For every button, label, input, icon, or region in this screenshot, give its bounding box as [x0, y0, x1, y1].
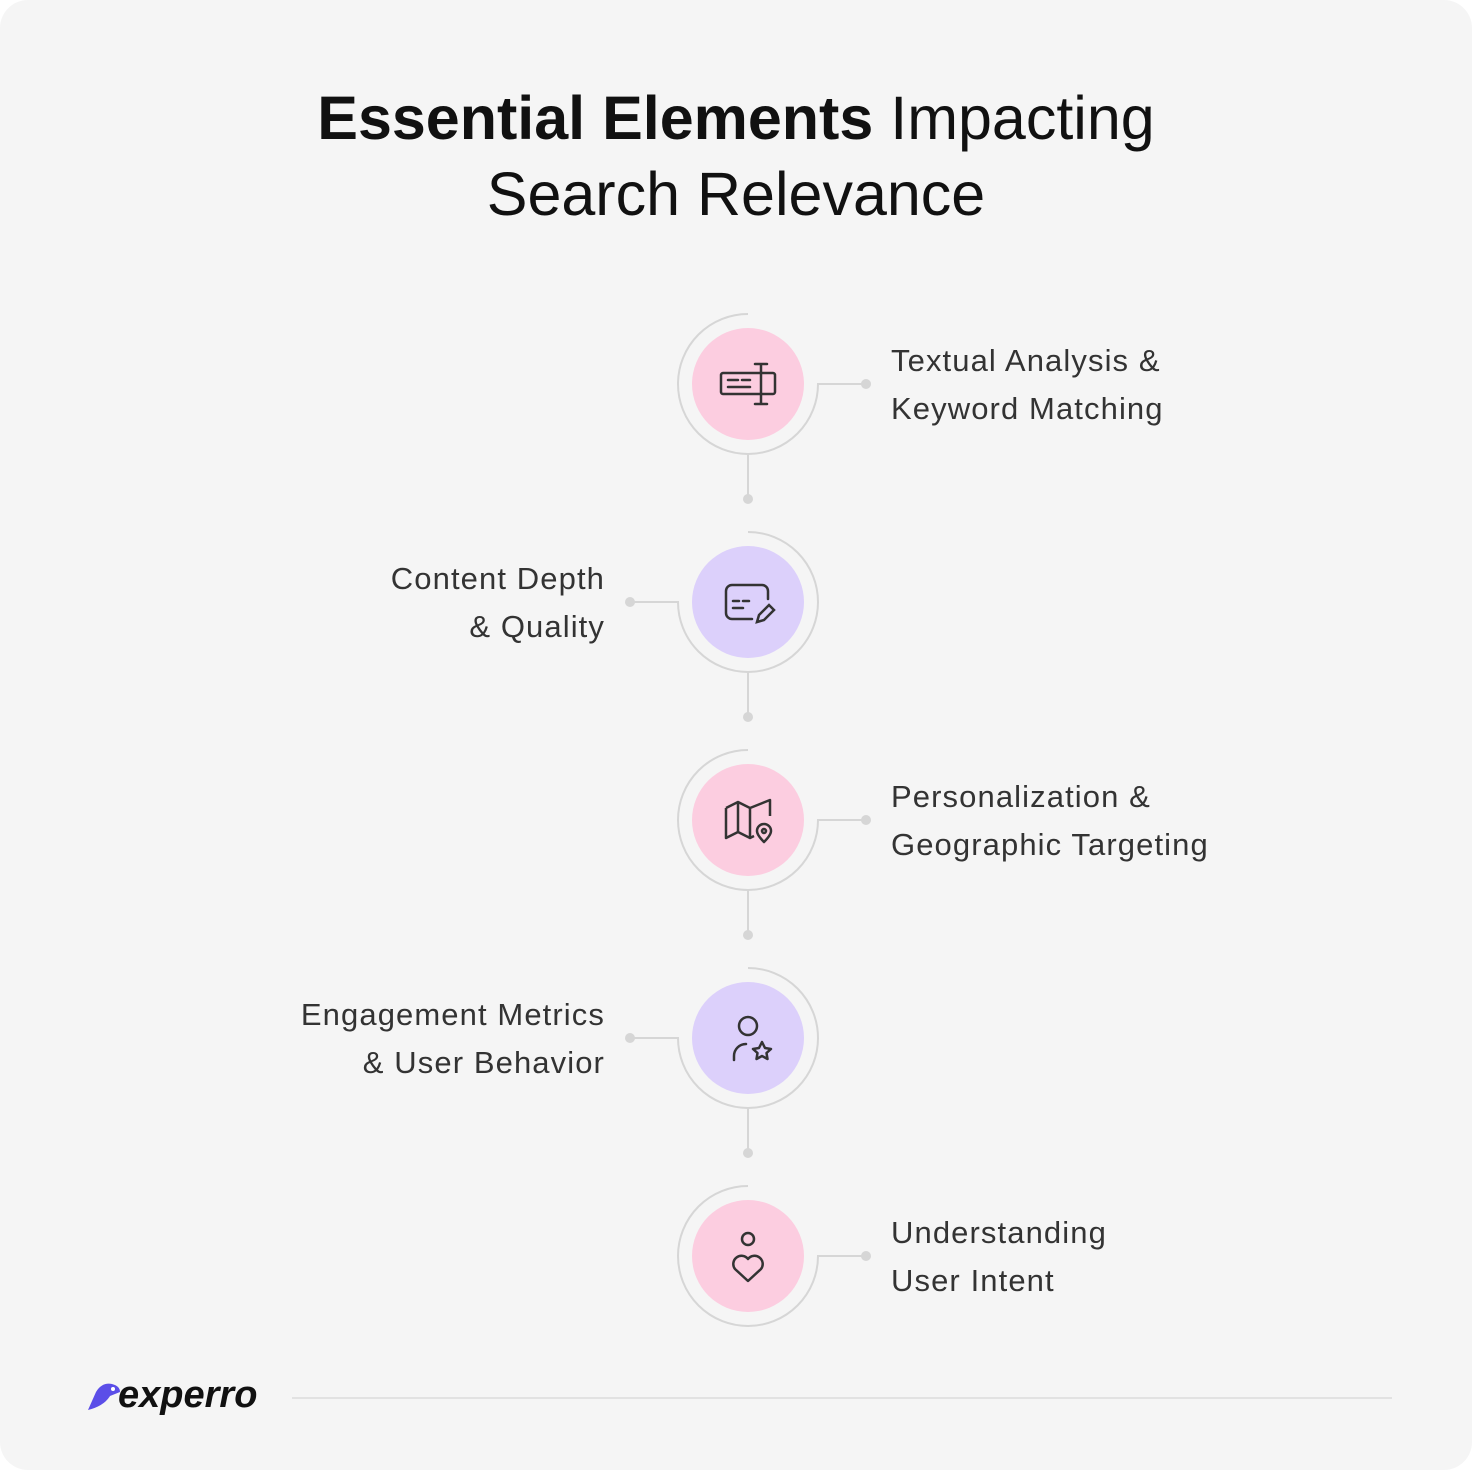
text: textual analysis: Keyword Matching — [891, 391, 1164, 426]
text: engagement — [301, 997, 605, 1080]
text: engagement: & User Behavior — [363, 1045, 605, 1080]
text: user intent — [891, 1215, 1107, 1298]
text: textual analysis — [891, 343, 1164, 426]
text: user intent: Understanding — [891, 1215, 1107, 1250]
text: user intent: User Intent — [891, 1263, 1055, 1298]
footer divider — [292, 1397, 1392, 1399]
text: content depth — [391, 561, 605, 644]
icon: content edit — [692, 546, 804, 658]
text: content depth: Content Depth — [391, 561, 605, 596]
title: Essential Elements Impacting — [317, 84, 1155, 152]
logo: experro — [118, 1374, 257, 1416]
icon: text input — [692, 328, 804, 440]
text: personalization — [891, 779, 1209, 862]
text: textual analysis: Textual Analysis & — [891, 343, 1161, 378]
text: engagement: Engagement Metrics — [301, 997, 605, 1032]
title — [317, 84, 1155, 228]
text: content depth: & Quality — [469, 609, 605, 644]
text: personalization: Geographic Targeting — [891, 827, 1209, 862]
icon: user star — [692, 982, 804, 1094]
title: Search Relevance — [487, 160, 985, 228]
icon: user heart — [692, 1200, 804, 1312]
icon: map pin — [692, 764, 804, 876]
text: personalization: Personalization & — [891, 779, 1151, 814]
